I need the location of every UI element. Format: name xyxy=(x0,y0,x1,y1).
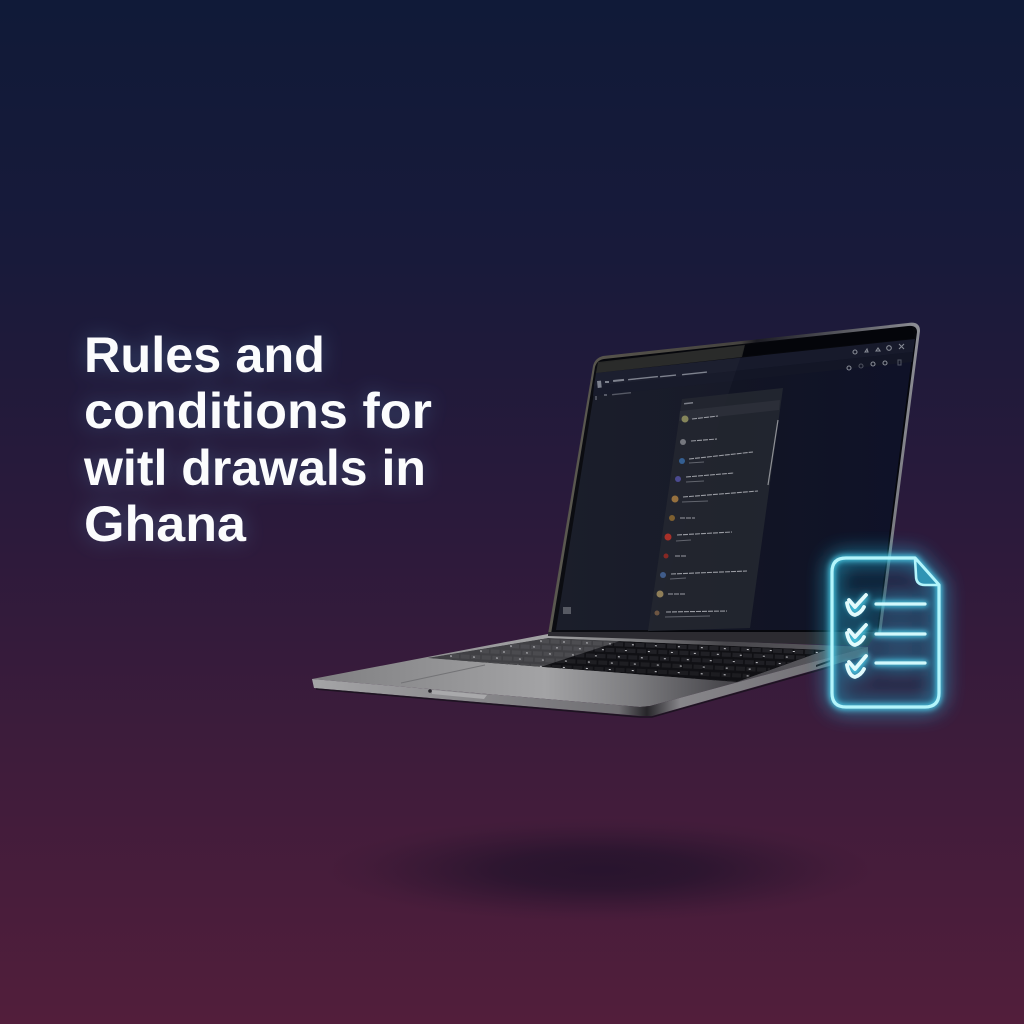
icon wide glow xyxy=(832,558,939,707)
laptop xyxy=(312,323,920,717)
key legend specks xyxy=(425,641,830,676)
title text: witl drawals in xyxy=(83,440,426,496)
window control icons xyxy=(847,344,904,370)
icon inner tint xyxy=(832,558,939,707)
side ports xyxy=(816,660,830,667)
rear hinge xyxy=(548,632,878,646)
title glow: conditions for xyxy=(84,383,432,439)
search results dropdown panel xyxy=(648,388,783,631)
title glow: witl drawals in xyxy=(83,440,426,496)
toolbar labels xyxy=(595,371,707,400)
title text: conditions for xyxy=(84,383,432,439)
title text: Rules and xyxy=(84,327,325,383)
list row avatars xyxy=(682,416,688,422)
keyboard xyxy=(420,638,830,683)
title text xyxy=(83,327,432,552)
title glow xyxy=(83,327,432,552)
title glow: Rules and xyxy=(84,327,325,383)
window title bar xyxy=(594,339,915,386)
checkmarks xyxy=(847,595,866,677)
list row text lines xyxy=(666,416,758,612)
glowing checklist document icon xyxy=(832,558,939,707)
title text: Ghana xyxy=(84,496,247,552)
folded corner xyxy=(915,558,939,585)
laptop screen lid xyxy=(548,323,920,634)
scrollbar xyxy=(768,420,778,485)
glare reflection on left of screen xyxy=(549,344,745,632)
title glow: Ghana xyxy=(84,496,247,552)
trackpad edge xyxy=(401,665,485,683)
right black band at top of screen xyxy=(743,326,914,356)
checklist lines xyxy=(876,604,925,663)
bottom shadow line xyxy=(316,667,830,717)
document outline xyxy=(832,558,939,707)
small screen logo xyxy=(563,607,571,614)
front notch xyxy=(432,690,487,699)
camera dot xyxy=(428,689,432,693)
window toolbar xyxy=(593,352,913,396)
icon close glow xyxy=(832,558,939,707)
front lip of base xyxy=(312,647,868,716)
title xyxy=(83,327,432,552)
laptop base deck xyxy=(312,634,868,707)
floating laptop shadow xyxy=(325,818,875,922)
